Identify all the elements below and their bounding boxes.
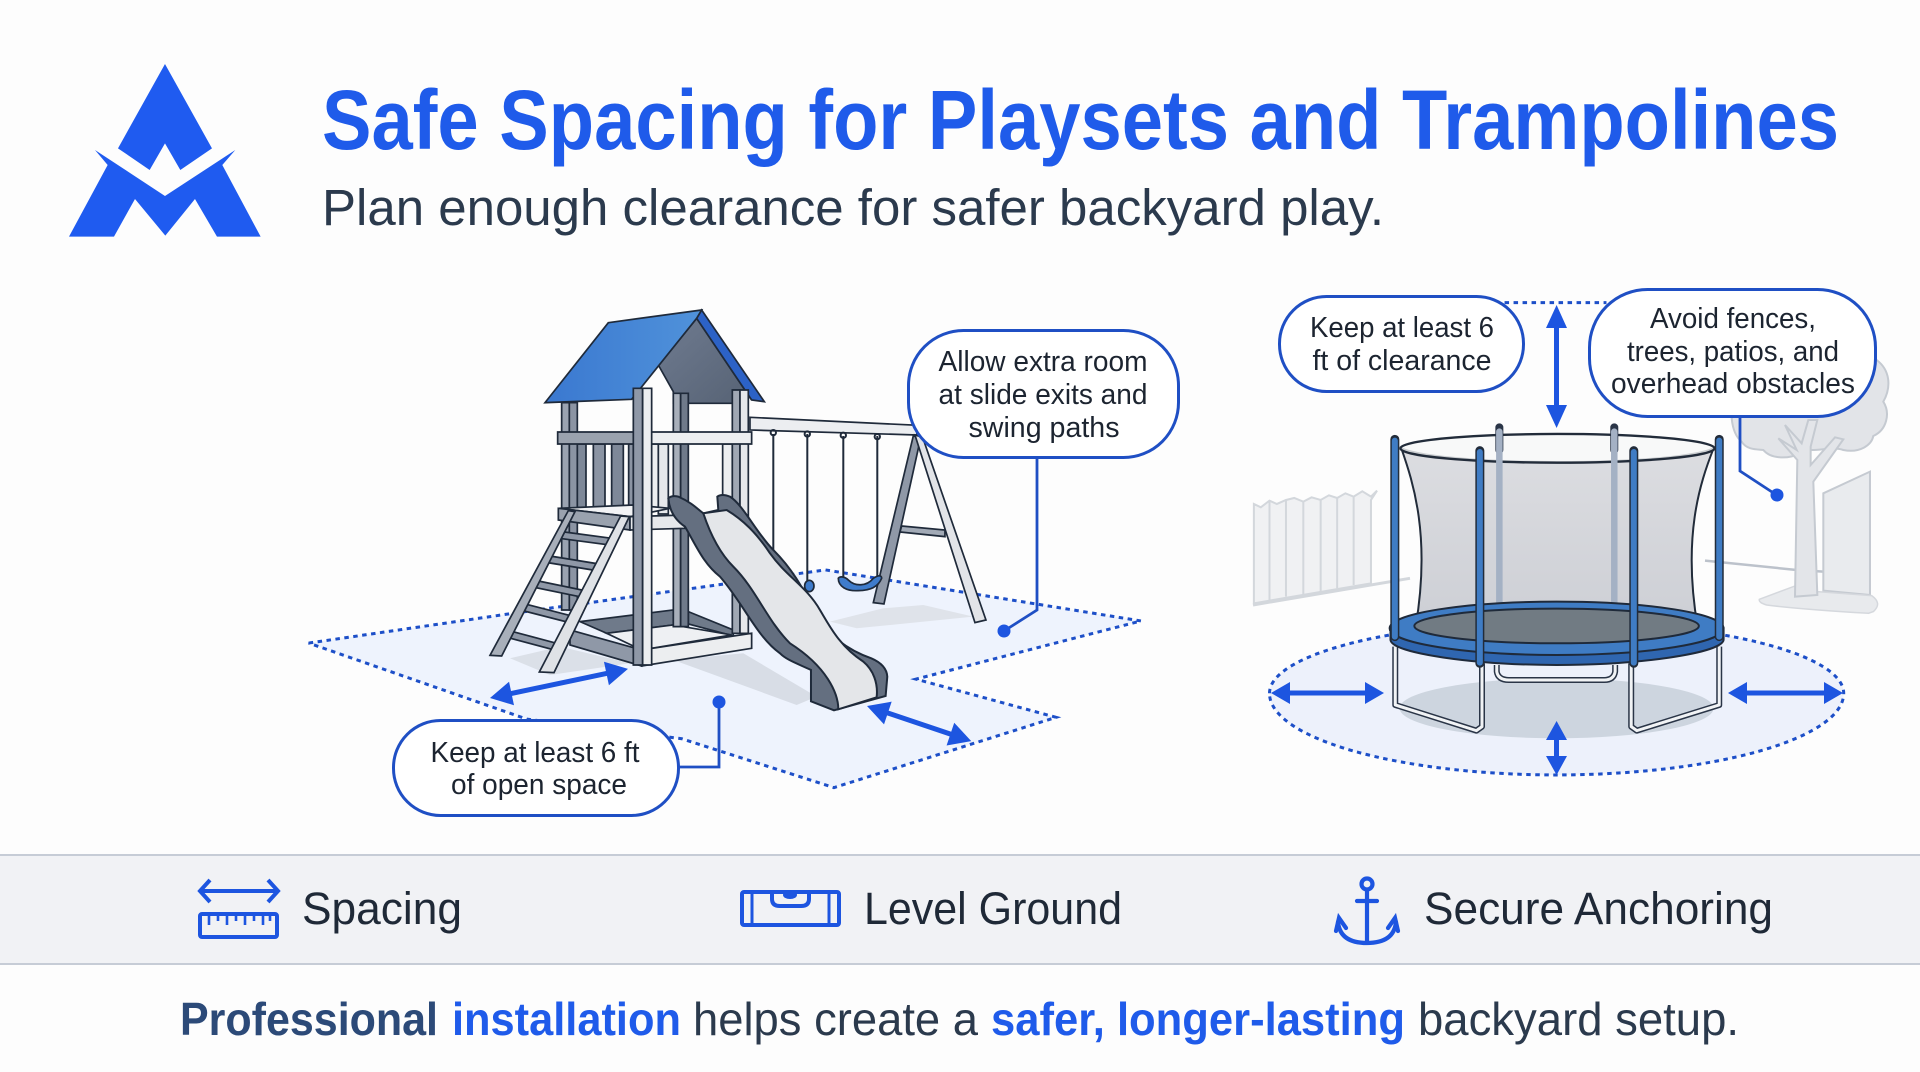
callout: open space: of open space — [451, 769, 627, 801]
callout: obstacles — [1590, 290, 1876, 502]
footer statement — [180, 993, 1739, 1045]
trampoline clearance zone — [1269, 622, 1844, 775]
callout: obstacles: trees, patios, and — [1627, 336, 1839, 368]
trampoline shadow — [1400, 678, 1714, 738]
icon: spacing ruler — [200, 880, 278, 937]
front poles — [1395, 439, 1719, 663]
slide — [668, 495, 887, 710]
callout: obstacles: Avoid fences, — [1650, 303, 1816, 335]
safety net — [1401, 448, 1714, 627]
label: secure anchoring: Secure Anchoring — [1424, 883, 1773, 934]
arrow: front clearance — [1546, 721, 1567, 775]
backyard tree and wall — [1705, 360, 1888, 613]
logo — [69, 64, 261, 237]
playset tower — [558, 388, 752, 666]
trampoline scene — [1253, 303, 1844, 775]
backyard fence — [1253, 491, 1410, 605]
icon: level — [742, 891, 839, 925]
back poles — [1499, 427, 1614, 603]
feature strip — [0, 854, 1920, 965]
label: spacing: Spacing — [302, 883, 462, 934]
label: level ground: Level Ground — [864, 883, 1122, 934]
arrow: playset side clearance — [488, 657, 630, 710]
arrow: left clearance — [1271, 682, 1384, 704]
playset roof — [545, 310, 764, 403]
callout: clearance: ft of clearance — [1312, 345, 1492, 377]
play area ground — [309, 570, 1141, 788]
callout: clearance: Keep at least 6 — [1310, 312, 1494, 344]
callout: slide exits: Allow extra room — [938, 346, 1148, 378]
dotted clearance top line — [1505, 301, 1606, 304]
playset illustration — [490, 310, 986, 710]
subtitle: Plan enough clearance for safer backyard play. — [322, 179, 1384, 236]
legs — [1395, 647, 1719, 731]
arrow: overhead clearance — [1546, 305, 1567, 428]
icon: anchor — [1336, 878, 1398, 943]
footer statement: Professional — [180, 993, 438, 1045]
callout: open space — [394, 696, 726, 816]
arrow: right clearance — [1728, 682, 1843, 704]
ladder — [490, 511, 629, 673]
ground shadows — [510, 605, 973, 705]
callout: slide exits — [908, 330, 1178, 638]
callout: obstacles: overhead obstacles — [1611, 368, 1855, 400]
footer statement: helps create a — [693, 993, 978, 1045]
footer statement: backyard setup. — [1418, 993, 1739, 1045]
callout: slide exits: at slide exits and — [938, 379, 1148, 411]
callout: clearance — [1280, 296, 1524, 392]
jumping mat — [1414, 609, 1699, 643]
frame pad — [1390, 628, 1724, 665]
callout: slide exits: swing paths — [968, 412, 1120, 444]
footer statement: safer, longer-lasting — [991, 993, 1405, 1045]
trampoline — [1390, 427, 1724, 731]
footer statement: installation — [452, 993, 681, 1045]
callout: open space: Keep at least 6 ft — [430, 737, 640, 769]
swing set — [750, 417, 986, 623]
arrow: slide exit clearance — [863, 695, 975, 752]
